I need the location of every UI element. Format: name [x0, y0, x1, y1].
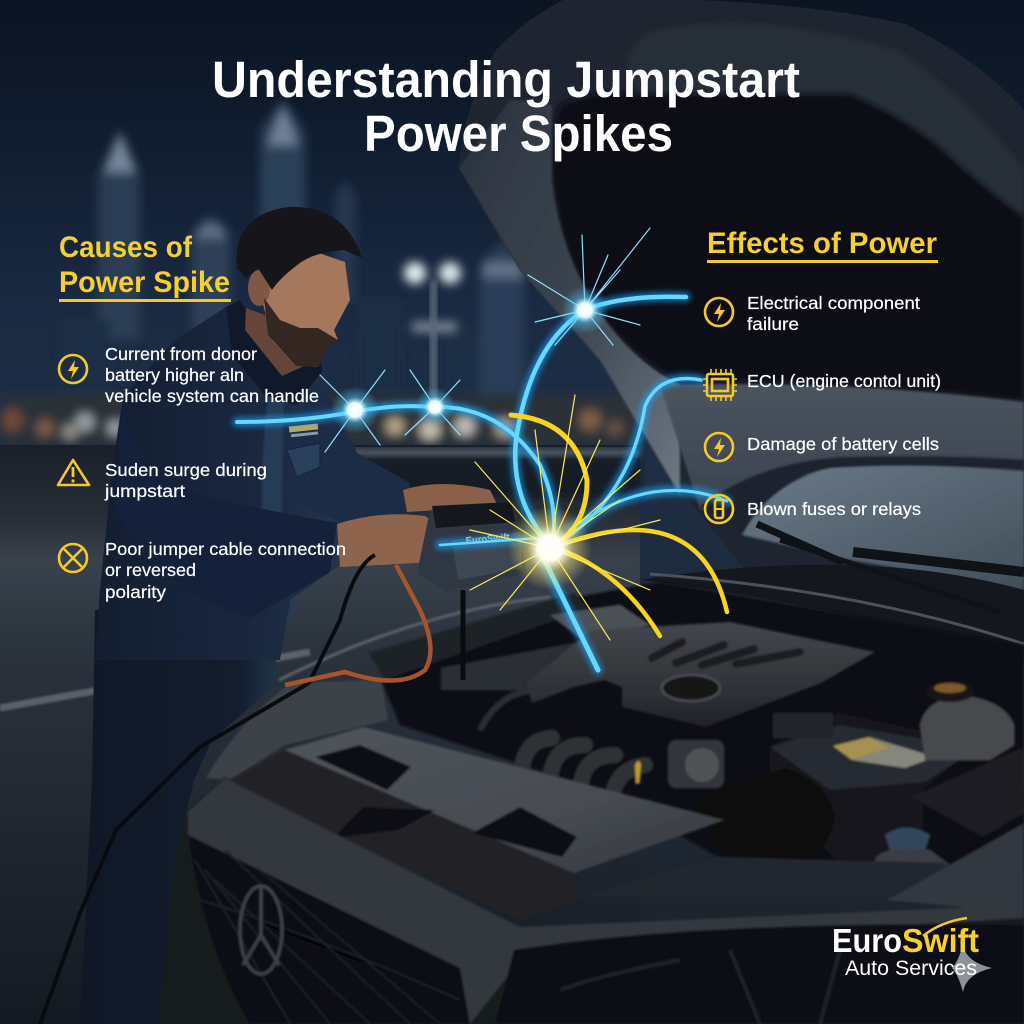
blue arcs core — [237, 297, 727, 670]
cause 2: jumpstart — [104, 481, 185, 501]
mechanic — [80, 207, 500, 1024]
intake manifold — [522, 738, 645, 805]
legs — [80, 600, 300, 1024]
hair — [237, 207, 362, 290]
effect 4 — [705, 495, 921, 523]
sparks — [320, 228, 660, 640]
cause 2: Suden surge during — [105, 460, 267, 480]
heading: effects of power: Effects of Power — [707, 227, 937, 260]
windshield — [742, 466, 1024, 590]
electric arcs — [237, 297, 727, 670]
upper arm sleeve — [285, 380, 410, 522]
icon: lightning in circle — [59, 355, 87, 383]
effect 2 — [703, 369, 941, 401]
jump box and cables: EuroSwift — [465, 532, 511, 547]
logo: EuroSwift Auto Services: Swift — [902, 922, 979, 959]
lower hand — [337, 514, 463, 567]
pocket — [287, 443, 320, 477]
left fender — [206, 680, 388, 780]
icon: ECU chip — [703, 369, 737, 401]
cause 3: polarity — [105, 582, 166, 602]
effect 3 — [705, 433, 939, 461]
ear — [248, 270, 270, 306]
forward sleeve — [115, 400, 337, 618]
neck — [245, 308, 322, 376]
effect 3: Damage of battery cells — [747, 434, 939, 454]
engine bay — [206, 582, 1024, 875]
effect 4: Blown fuses or relays — [747, 499, 921, 519]
icon: crossed circle — [59, 544, 87, 572]
cause 2 — [58, 460, 267, 501]
heading: causes of power spike: Power Spike — [59, 266, 230, 299]
grille — [188, 835, 470, 1024]
cause 1: Current from donor — [105, 344, 257, 364]
effect 2: ECU (engine contol unit) — [747, 371, 941, 391]
effect 1 — [705, 293, 920, 334]
car logo emblem — [240, 886, 282, 974]
placket — [262, 385, 284, 610]
title: Understanding Jumpstart — [212, 51, 800, 108]
car front body — [158, 727, 1024, 1024]
face — [262, 250, 350, 367]
effect 1: Electrical component — [747, 293, 920, 313]
heading: causes of power spike: Causes of — [59, 231, 192, 264]
open car hood — [459, 0, 1024, 640]
front edge band — [188, 778, 1024, 1024]
cause 1: battery higher aln — [105, 365, 244, 385]
air intake — [694, 768, 835, 862]
cause 1: vehicle system can handle — [105, 386, 319, 406]
badge — [289, 423, 318, 432]
icon: lightning in circle — [705, 298, 733, 326]
wipers and cowl — [640, 524, 1024, 660]
blue arcs glow — [237, 297, 727, 670]
beard — [264, 298, 338, 367]
battery — [770, 713, 978, 870]
logo: EuroSwift Auto Services: Auto Services — [845, 957, 977, 980]
icon: warning triangle — [58, 460, 89, 485]
cause 3: or reversed — [105, 560, 196, 580]
icon: fuse in circle — [705, 495, 733, 523]
engine cover — [526, 622, 875, 727]
icon: lightning in circle — [705, 433, 733, 461]
jump box and cables — [40, 502, 527, 1024]
title — [212, 51, 800, 162]
headlight — [495, 924, 1024, 1024]
dipstick — [635, 761, 641, 783]
torso — [95, 307, 357, 660]
collar — [226, 300, 322, 405]
road — [0, 445, 640, 1024]
upper hand — [403, 484, 500, 512]
plastic shroud — [285, 727, 725, 873]
title: Power Spikes — [364, 105, 673, 162]
effect 1: failure — [747, 314, 799, 334]
throttle body — [668, 740, 724, 788]
reservoir — [920, 695, 1014, 760]
logo: EuroSwift Auto Services: Euro — [832, 922, 902, 959]
cause 3: Poor jumper cable connection — [105, 539, 346, 559]
cause 1 — [59, 344, 319, 406]
logo: EuroSwift Auto Services — [832, 918, 992, 992]
heading: causes of power spike — [59, 231, 231, 302]
washer cap — [885, 828, 930, 850]
inner fender strip — [580, 857, 947, 897]
cause 3 — [59, 539, 346, 602]
yellow arcs — [511, 415, 727, 636]
